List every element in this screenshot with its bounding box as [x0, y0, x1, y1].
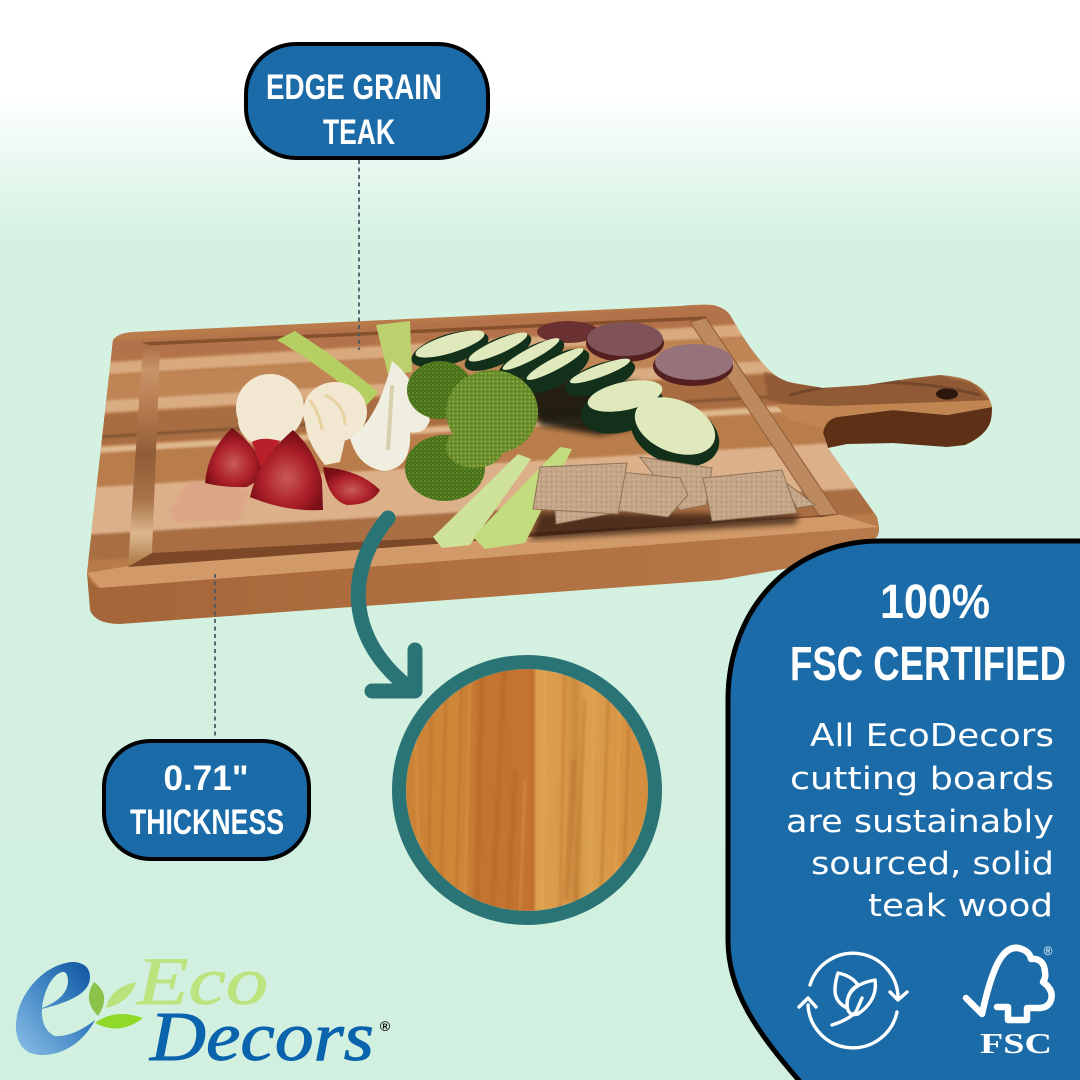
icon: FSC logo: [966, 944, 1053, 1060]
cutting board with food: [80, 290, 1000, 624]
panel body text: cutting boards: [790, 761, 1054, 797]
celery sticks bottom: [433, 447, 572, 549]
handle underside: [823, 407, 992, 448]
logo registered mark: ®: [380, 1018, 391, 1034]
top groove: [143, 318, 706, 344]
cucumber slices: [407, 323, 729, 479]
panel body text: teak wood: [868, 888, 1053, 924]
panel body text: are sustainably: [786, 804, 1054, 840]
callout: thickness: 0.71": [164, 758, 248, 798]
celery sticks top: [277, 321, 412, 405]
juice stain: [170, 480, 250, 522]
icon: FSC logo: ®: [1044, 944, 1053, 958]
leader line: edge grain: [358, 160, 360, 350]
panel: FSC certified: [728, 541, 1080, 1080]
broccoli: [405, 361, 538, 501]
icon: FSC logo: FSC: [980, 1028, 1052, 1060]
handle grain: [790, 380, 980, 395]
cauliflower: [236, 361, 430, 471]
callout: edge grain teak: TEAK: [323, 112, 395, 152]
panel heading: [790, 576, 1066, 691]
bottom groove: [128, 514, 838, 567]
callout: edge grain teak: EDGE GRAIN: [266, 67, 442, 107]
wood grain detail circle: [399, 660, 655, 920]
panel body text: All EcoDecors: [810, 718, 1054, 754]
panel body text: sourced, solid: [811, 846, 1054, 882]
strawberries: [205, 428, 380, 510]
callout: thickness: THICKNESS: [130, 802, 284, 842]
handle lighter band: [775, 400, 992, 428]
wood stripes: [80, 294, 900, 561]
icon: recycling leaf: [799, 953, 907, 1048]
board front side: [87, 527, 879, 624]
front lip: [87, 514, 879, 588]
left groove: [128, 343, 160, 567]
callout: edge grain teak: [246, 44, 488, 158]
panel heading: 100%: [880, 576, 990, 629]
logo word Eco: Eco: [136, 943, 268, 1019]
crackers: [533, 457, 815, 524]
curved arrow to wood detail: [358, 518, 415, 691]
right groove: [690, 318, 838, 517]
sausage slices: [537, 321, 733, 386]
handle top: [764, 372, 992, 408]
leader line: thickness: [214, 574, 216, 738]
board top surface: [87, 304, 992, 588]
EcoDecors logo: [16, 943, 391, 1076]
logo leaves: [89, 982, 143, 1028]
logo e mark: [16, 962, 95, 1055]
logo word Decors: Decors: [149, 999, 374, 1076]
food shadows: [510, 375, 650, 435]
panel body text: [786, 718, 1054, 924]
callout: thickness: [104, 741, 309, 859]
handle hole: [936, 388, 958, 400]
